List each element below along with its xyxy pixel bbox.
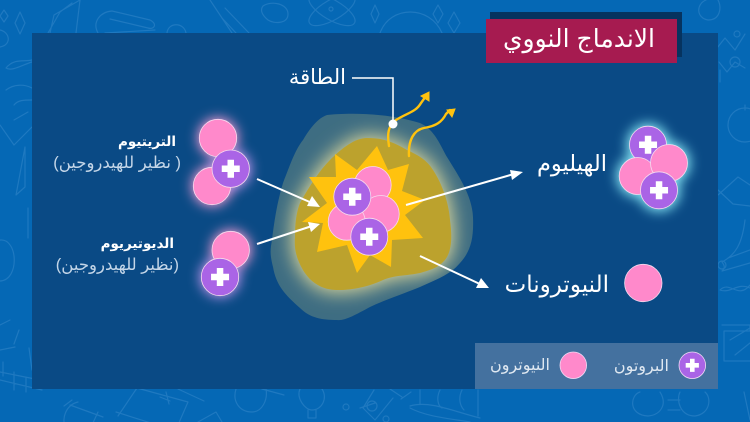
neutrons label: النيوترونات — [505, 271, 609, 298]
arrow: deuterium to core — [257, 222, 320, 244]
main panel — [32, 33, 718, 389]
legend: proton: البروتون — [614, 358, 669, 376]
tritium label: التريتيوم — [118, 134, 176, 150]
energy label — [289, 66, 398, 128]
tritium label — [53, 134, 181, 173]
tritium label: ( نظير للهيدروجين) — [53, 154, 181, 173]
energy arrows — [388, 92, 455, 156]
energy label: الطاقة — [289, 66, 346, 89]
deuterium label: الديوتيريوم — [101, 236, 174, 252]
legend: proton — [614, 352, 706, 379]
legend — [475, 343, 718, 389]
arrow: to helium — [406, 170, 523, 205]
fusion star burst — [302, 146, 425, 273]
arrow: tritium to core — [257, 179, 320, 207]
neutron icon — [625, 264, 662, 302]
deuterium label: (نظير للهيدروجين) — [56, 256, 179, 275]
title banner: الاندماج النووي — [503, 25, 655, 54]
deuterium label — [56, 236, 179, 275]
legend: neutron — [490, 352, 587, 379]
title banner — [486, 12, 682, 63]
deuterium atom — [200, 230, 251, 297]
arrow: to neutrons — [420, 256, 489, 288]
energy cloud — [271, 114, 473, 320]
reaction core — [271, 114, 473, 320]
nucleus — [328, 166, 399, 255]
legend: neutron: النيوترون — [490, 357, 550, 375]
helium atom — [617, 124, 690, 211]
tritium atom — [192, 118, 251, 206]
helium label: الهيليوم — [537, 151, 607, 177]
